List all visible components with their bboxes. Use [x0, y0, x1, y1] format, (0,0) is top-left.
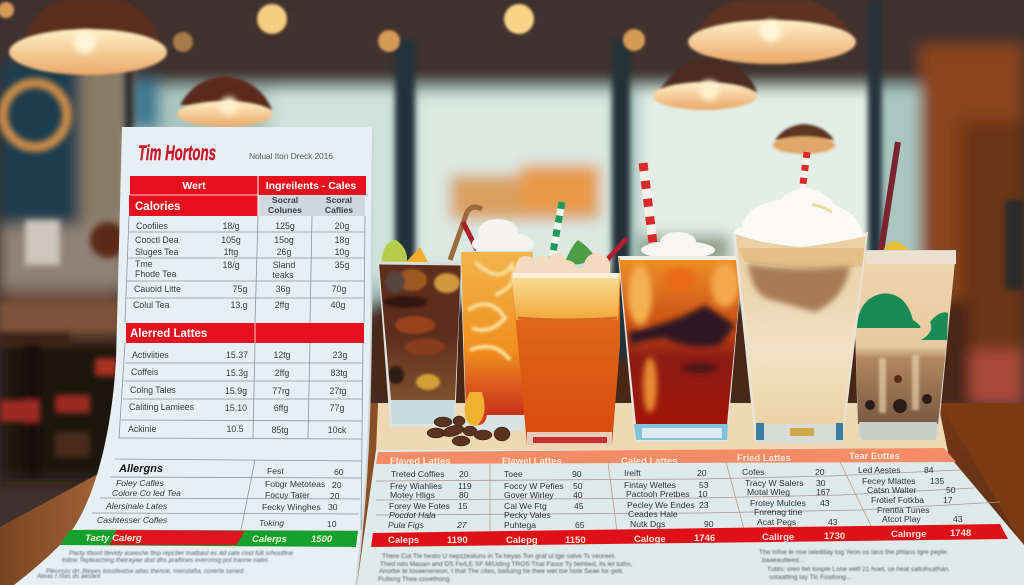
section: allergens: 10 [327, 519, 337, 529]
section: latte rows: Coffeis [131, 367, 159, 377]
section: drinks rows: 13.g [230, 300, 248, 310]
section: latte rows: 10.5 [226, 424, 244, 434]
column 2: Cal We Ftg [504, 501, 547, 511]
section: latte rows: 2ffg [275, 368, 289, 378]
section band: altered lattes [126, 323, 364, 343]
footnotes [36, 550, 294, 580]
section: latte rows: Activiities [132, 350, 169, 360]
column 1: Forey We Fotes [389, 501, 450, 511]
section: drinks rows: Cooctl Dea [135, 235, 179, 245]
column 4: Cofes [742, 467, 764, 477]
section: drinks rows: teaks [272, 270, 294, 280]
column 4: 43 [820, 498, 830, 508]
column 2: Puhtega [504, 520, 536, 530]
section: allergens: Alersinale Lates [105, 501, 168, 511]
section: latte rows: 85tg [271, 425, 289, 435]
lid foam [866, 251, 956, 264]
table grid [376, 460, 1000, 531]
table header: Ingreilents - Cales [266, 180, 356, 192]
footnotes: Pacty tfasot ttevidy aseeshe ttnp repctier tnatbast es ad sate cost fult srhostfine [69, 550, 294, 557]
footnotes: toltoe Tepteaching thetrayae dod dhs praftioes everonsg pol tranne natel. [62, 557, 269, 564]
drink 5: tall cream latte [733, 152, 868, 443]
section: drinks rows: 105g [221, 235, 241, 245]
green cup mark [857, 294, 948, 340]
column 5: Fecey Mlattes [862, 476, 916, 486]
cinnamon stick and straw [450, 207, 482, 260]
column 2: Toee [504, 469, 523, 479]
drink 2: iced tea [450, 207, 534, 431]
lamp: top right [688, 0, 856, 64]
column 3: Pactooh Pretbes [626, 489, 690, 499]
section: allergens: Toking [259, 518, 284, 528]
table header: Caflies [325, 205, 353, 215]
footnotes: The Iofoe ie noe ialedday tog Yeon us tass the phtass tgre peple. [759, 549, 949, 556]
column 5 [858, 465, 963, 524]
section: drinks rows: 18/g [222, 260, 240, 270]
whipped cream [733, 188, 866, 247]
column 5: Led Aestes [858, 465, 901, 475]
column 3 [624, 468, 714, 529]
section: latte rows: Ackinie [128, 424, 156, 434]
section: allergens: 20 [330, 491, 340, 501]
calorie totals band: Calepg [506, 535, 538, 546]
calorie totals band: Caloge [634, 534, 666, 545]
column 5: 50 [946, 485, 956, 495]
section: drinks rows: 18/g [222, 221, 240, 231]
section: drinks rows: 70g [332, 284, 346, 294]
section: latte rows: 83tg [330, 368, 348, 378]
section: drinks rows: 125g [275, 221, 295, 231]
column 4: Frotey Mulcles [750, 498, 806, 508]
section: allergens: Fest [267, 466, 284, 476]
column 4: 167 [816, 487, 831, 497]
column 2: 90 [572, 469, 582, 479]
column 1: Frey Wiahlies [390, 481, 442, 491]
section: allergens: Fecky Winghes [262, 502, 321, 512]
section band: altered lattes: Alerred Lattes [130, 328, 207, 340]
column header band: Flawel Lattes [502, 456, 562, 467]
section: latte rows: 27tg [329, 386, 347, 396]
column 3: Ireift [624, 468, 641, 478]
column 5: Frentla Tunes [877, 505, 930, 515]
beige tray [376, 403, 948, 452]
subtitle: Nolual Iton Dreck 2016 [249, 151, 333, 161]
red striped straw [802, 152, 807, 192]
section: drinks rows: 20g [335, 221, 349, 231]
column 3: 53 [699, 480, 709, 490]
drink 3: layered orange drink [511, 202, 627, 445]
calorie totals band: 1746 [694, 533, 715, 544]
section: latte rows: 15.3g [226, 368, 248, 378]
green striped straw [552, 202, 562, 258]
calorie totals band: Calirge [762, 532, 794, 543]
section: latte rows: 77g [330, 403, 344, 413]
lamp: mid right [653, 58, 757, 110]
column 1: Pula Figs [388, 520, 425, 530]
ceiling lamps [0, 0, 856, 154]
footnotes: baaeautteed... [762, 557, 804, 564]
whipped cream [472, 219, 534, 256]
column 5: 135 [930, 476, 945, 486]
column header band: Tear Euttes [849, 451, 900, 462]
footnotes: There Cut Tle heato U nepzzealuns in Ta heyas Ton graf ul tge salve Ts veoreet. [382, 553, 616, 560]
footnotes: sotaatting lay Tlc Foatlong... [769, 574, 852, 581]
column 4: Fnrenag tine [754, 507, 802, 517]
column 3: Nutk Dgs [630, 519, 665, 529]
calorie totals band: Caleps [388, 535, 419, 546]
column 4: Motal Wleg [747, 487, 790, 497]
table header: Colunes [268, 205, 302, 215]
logo: Tim Hortons [138, 142, 216, 165]
column 2: Gover Wirley [504, 490, 554, 500]
column 1: 15 [458, 501, 468, 511]
footnotes [378, 549, 950, 583]
section: drinks rows: Coofiies [136, 221, 168, 231]
column header band: Fried Lattes [737, 453, 791, 464]
section: drinks rows: Sluges Tea [135, 247, 178, 257]
section: latte rows: 10ck [328, 425, 347, 435]
column 4: Tracy W Salers [745, 478, 803, 488]
drink 4: iced red and amber tea [618, 163, 743, 442]
column 3: 20 [697, 468, 707, 478]
section: drinks rows: 10g [335, 247, 349, 257]
footnotes: Pleonslu dn Jlteyes tosstleatse atlas thenoe, merutafta, corerfa sened. [46, 568, 245, 575]
table header [129, 176, 366, 216]
section: allergens: 60 [334, 467, 344, 477]
section: drinks rows: 35g [335, 260, 349, 270]
section: allergens: Colore Co led Tea [112, 488, 181, 498]
section: drinks rows: 2ffg [275, 300, 289, 310]
column 2: Foccy W Pefies [504, 481, 564, 491]
column 2: Pecky Vales [504, 510, 551, 520]
section: allergens: Focuy Tater [265, 490, 310, 500]
column 4: Acat Pegs [757, 517, 796, 527]
section: drinks rows: 15og [274, 235, 294, 245]
section: latte rows: Colng Tales [130, 385, 176, 395]
table header: Wert [182, 180, 206, 192]
footnotes: Thed ndo Mauan and DS Fe/LE SF M/Uding TROS That Fasor Ty behtied, its let tuths, [380, 561, 633, 568]
section: latte rows: 77rg [272, 386, 290, 396]
column 3: 10 [698, 489, 708, 499]
table header: Socral [272, 195, 298, 205]
section: drinks rows: Cauoid Litte [134, 284, 181, 294]
drink 1: iced cola [378, 240, 461, 427]
column 3: Pecley We Endes [627, 500, 695, 510]
section: drinks rows: 75g [233, 284, 247, 294]
calorie totals band: 1150 [565, 535, 586, 546]
footnotes: Pulteng Thee covethong. [378, 576, 451, 583]
calorie totals band [60, 530, 358, 547]
footnotes: Ateas t rltas ds aesaot [36, 573, 100, 580]
section: allergens [97, 463, 344, 529]
nutrition card: left [14, 127, 373, 585]
pearls [865, 375, 932, 413]
column 4: 30 [816, 478, 826, 488]
calorie totals band: 1748 [950, 528, 971, 539]
red striped straw [643, 163, 653, 243]
section: drinks rows: 40g [331, 300, 345, 310]
column header band: Flaved Lattes [390, 456, 451, 467]
section: allergens: Foley Cafles [116, 478, 164, 488]
mint and red straw [565, 238, 627, 264]
section: allergens: 30 [328, 502, 338, 512]
drink 6: boba milk tea [853, 142, 956, 440]
footnotes: Anorbe te toseeneneon, I that The cites, batluing he thee wet tse hote Seae for gett. [379, 568, 624, 575]
calorie totals band: Calerps [252, 534, 287, 545]
column 5: 17 [943, 495, 953, 505]
section: latte rows [128, 350, 348, 435]
table header: Calories [135, 201, 180, 213]
lamp: far right [773, 124, 835, 154]
column 1: 119 [458, 481, 472, 491]
foam balls [515, 253, 610, 284]
wooden table [0, 403, 1024, 585]
table grid [84, 216, 365, 531]
section: latte rows: 15.10 [225, 403, 247, 413]
table header: Scoral [326, 195, 352, 205]
column 3: 90 [704, 519, 714, 529]
column 2 [504, 469, 585, 530]
column 1: Treted Coffies [391, 469, 444, 479]
section: drinks rows [133, 221, 349, 310]
column 3: Ceades Hale [628, 509, 678, 519]
section: allergens: Cashtesser Cofles [97, 515, 168, 525]
section: drinks rows: Sland [273, 260, 295, 270]
section: drinks rows: 1ftg [224, 247, 238, 257]
column 5: 43 [953, 514, 963, 524]
coffee beans and orange slice [427, 392, 510, 446]
garnish [381, 240, 428, 262]
section: allergens: 20 [332, 480, 342, 490]
column 2: 50 [573, 481, 583, 491]
section: allergens: Allergns [118, 463, 163, 475]
section: allergens: Fobgr Metoteas [265, 479, 325, 489]
column 2: 45 [574, 501, 584, 511]
lamp: mid left [177, 76, 273, 127]
section: drinks rows: 36g [276, 284, 290, 294]
footnotes: Tubts: sreo tlet tonpte Lone well 21 hoet, se heal saltohsathan. [767, 566, 950, 573]
section: latte rows: 15.9g [225, 386, 247, 396]
ceiling spotlights [0, 2, 645, 52]
section: drinks rows: 18g [335, 235, 349, 245]
column header band: Caled Lattes [621, 456, 678, 467]
column 5: Catsn Walter [867, 485, 916, 495]
calorie totals band: 1500 [311, 534, 333, 545]
column 2: 40 [573, 490, 583, 500]
calorie totals band: Calnrge [891, 529, 926, 540]
column 4 [742, 467, 838, 527]
column 3: Fintay Weltes [624, 480, 676, 490]
section: latte rows: 6ffg [274, 403, 288, 413]
column 5: Frotief Fotkba [871, 495, 924, 505]
section: latte rows: 15.37 [226, 350, 248, 360]
section: latte rows: 12tg [273, 350, 291, 360]
column 4: 43 [828, 517, 838, 527]
calorie totals band [371, 524, 1008, 547]
column 1: Motey Hligs [390, 490, 435, 500]
menu sheet: lower right [357, 448, 1024, 585]
straw and lemon [880, 142, 912, 258]
column 1: 27 [456, 520, 468, 530]
column 1: 80 [459, 490, 469, 500]
calorie totals band: 1190 [447, 535, 468, 546]
whipped cream [641, 232, 715, 259]
lamp: top left [9, 0, 167, 75]
section: latte rows: 23g [333, 350, 347, 360]
column 2: 65 [575, 520, 585, 530]
column 1: 20 [459, 469, 469, 479]
column 4: 20 [815, 467, 825, 477]
column 3: 23 [699, 500, 709, 510]
section: latte rows: Caliting Lamiees [129, 402, 195, 412]
section: drinks rows: Tme [135, 259, 153, 269]
section: drinks rows: 26g [277, 247, 291, 257]
calorie totals band: 1730 [824, 531, 845, 542]
column 1: Pocdot Hala [389, 510, 436, 520]
column header band [376, 448, 956, 467]
column 5: Atcot Play [882, 514, 921, 524]
calorie totals band: Tacty Calerg [85, 533, 142, 544]
section: drinks rows: Fhode Tea [135, 269, 177, 279]
section: drinks rows: Colul Tea [133, 300, 170, 310]
column 5: 84 [924, 465, 934, 475]
column 1 [388, 469, 472, 530]
